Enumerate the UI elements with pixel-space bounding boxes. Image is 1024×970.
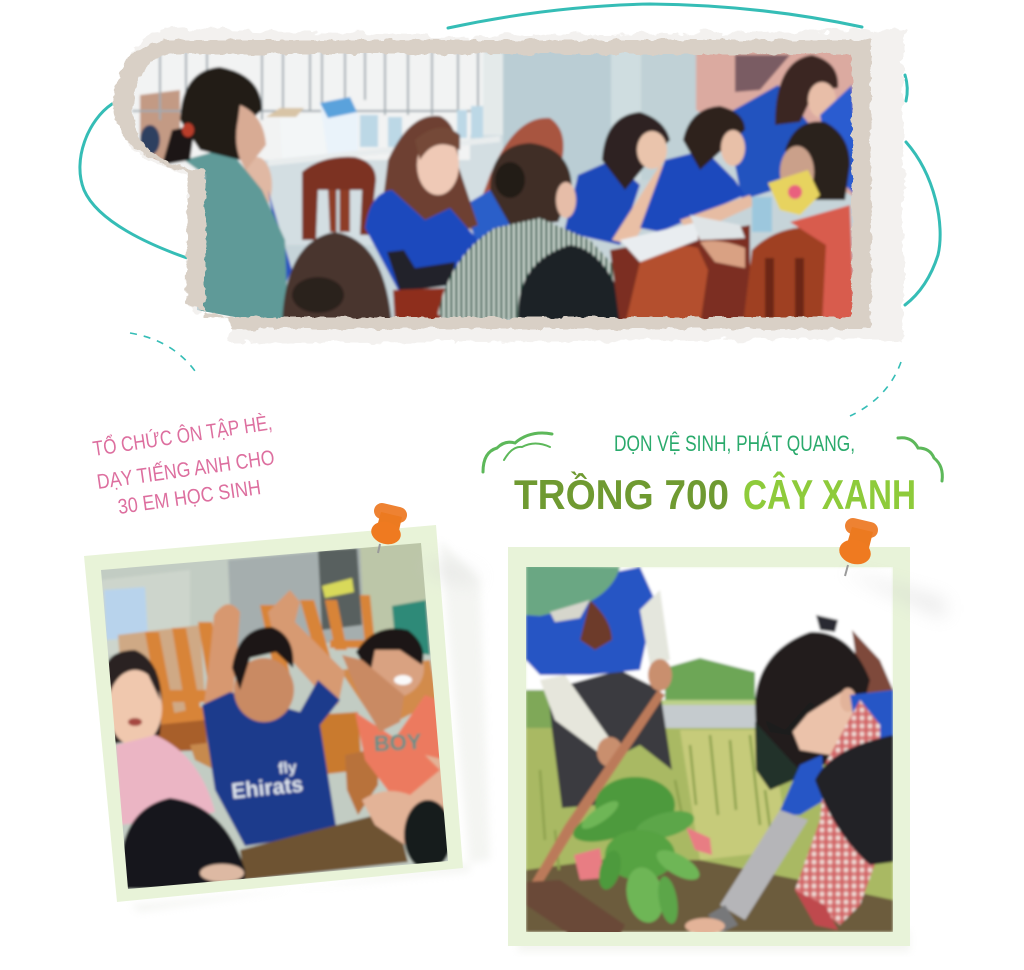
green headline: dark part: TRỒNG 700 xyxy=(514,470,729,518)
icon: right orange pushpin xyxy=(836,526,874,576)
woman in floral mask xyxy=(768,122,855,325)
classroom background xyxy=(101,540,430,655)
boy in coral shirt xyxy=(342,628,445,800)
pink caption: DẠY TIẾNG ANH CHO xyxy=(95,446,276,494)
volunteer in centre xyxy=(365,116,564,325)
woman in striped shirt xyxy=(438,143,630,325)
volunteers in blue xyxy=(564,106,755,245)
right photo: planting trees xyxy=(526,565,893,935)
left polaroid frame xyxy=(84,525,463,902)
landscape xyxy=(526,658,893,932)
orange chairs xyxy=(118,595,438,815)
boy in blue shirt: Ehirats xyxy=(230,771,304,804)
pink caption: 30 EM HỌC SINH xyxy=(116,476,262,519)
green headline: light part: CÂY XANH xyxy=(743,470,916,518)
top photo: volunteers at health check table xyxy=(125,45,860,330)
volunteer with hoe xyxy=(526,565,712,880)
girl in pink hoodie xyxy=(106,650,215,825)
left polaroid shadow xyxy=(130,540,490,912)
icon: green cloud doodle xyxy=(483,433,552,472)
top photo beige frame xyxy=(113,40,871,329)
supply boxes and bottles xyxy=(266,97,500,166)
right polaroid frame xyxy=(508,547,910,946)
hoe xyxy=(526,690,665,935)
left photo: children raising hands xyxy=(95,540,455,895)
teal hand-drawn outline xyxy=(80,4,940,305)
boy in blue shirt: fly xyxy=(277,759,298,778)
right polaroid shadow xyxy=(518,930,910,952)
boy in blue shirt xyxy=(202,590,345,846)
chair back xyxy=(302,157,376,240)
heads in foreground xyxy=(282,232,392,325)
pink caption xyxy=(91,410,276,519)
window xyxy=(132,52,639,245)
right pin shadow xyxy=(840,570,945,618)
green caption line 1: DỌN VỆ SINH, PHÁT QUANG, xyxy=(614,431,855,456)
sapling xyxy=(570,777,704,926)
icon: left orange pushpin xyxy=(369,511,403,553)
desk xyxy=(240,810,408,880)
dashed path left xyxy=(130,333,195,371)
blurred foreground heads and hands xyxy=(120,755,452,889)
table and chairs xyxy=(610,197,835,325)
left pin shadow xyxy=(419,556,481,588)
dashed path right xyxy=(850,362,901,416)
icon: green squiggle doodle xyxy=(898,438,942,481)
top photo torn paper xyxy=(118,28,903,343)
volunteers back row right xyxy=(696,45,860,200)
boy in coral shirt: BOY xyxy=(373,729,422,756)
woman in teal jacket xyxy=(140,67,292,325)
pink caption: TỔ CHỨC ÔN TẬP HÈ, xyxy=(91,410,274,461)
girl with pot xyxy=(685,615,893,934)
